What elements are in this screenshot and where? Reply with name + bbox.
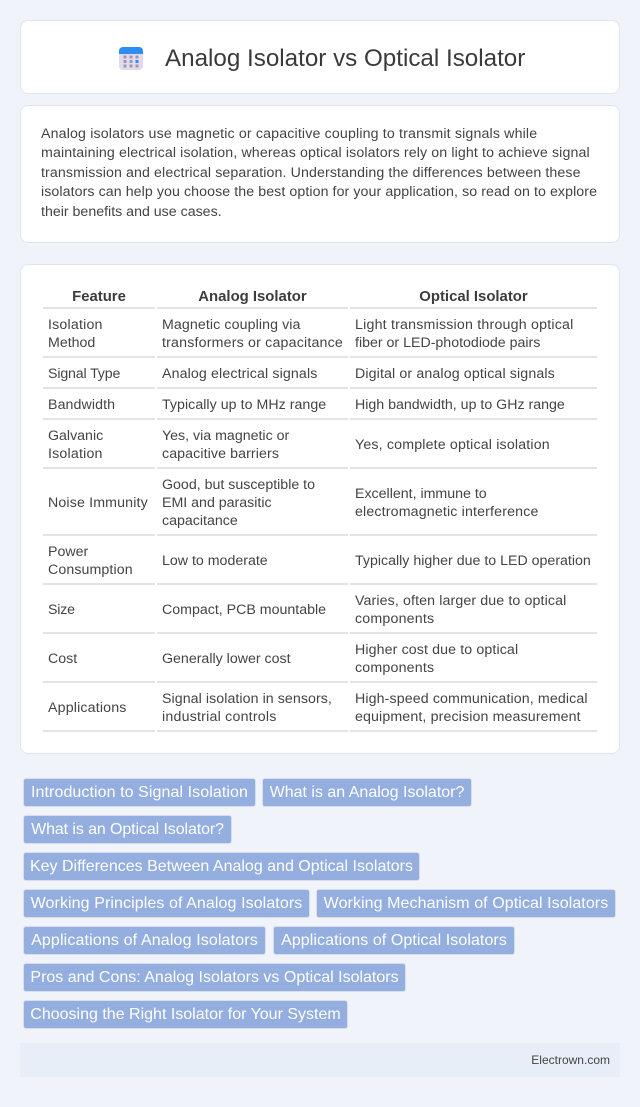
row: applications: Signal isolation in sensors, [162,691,332,707]
row: power consumption: Power [48,544,88,560]
row: galvanic isolation: Galvanic [48,428,103,444]
chip: what is analog [262,778,472,807]
chip: pros and cons [23,963,406,992]
row: size: Compact, PCB mountable [162,602,326,618]
footer credit: Electrown.com [531,1053,610,1067]
chip: choosing: Choosing the Right Isolator for Your System [30,1006,341,1023]
chip: working mechanism: Working Mechanism of Optical Isolators [324,895,608,912]
row: noise immunity: Excellent, immune to [355,486,487,502]
table header row: Feature [72,289,126,305]
chip: what is optical [23,815,232,844]
row: applications [48,691,588,725]
row: signal type [48,366,555,382]
chip: applications optical: Applications of Optical Isolators [281,932,507,949]
comparison table [43,289,597,732]
row: isolation method: Isolation [48,317,103,333]
row: noise immunity: electromagnetic interference [355,504,538,520]
chip: working principles [23,889,310,918]
chip: key differences [23,852,420,881]
chip: introduction [23,778,256,807]
chip: working principles: Working Principles of Analog Isolators [31,895,302,912]
chip: pros and cons: Pros and Cons: Analog Isolators vs Optical Isolators [30,969,399,986]
table header row: Optical Isolator [419,289,528,305]
row: noise immunity: Noise Immunity [48,495,148,511]
intro paragraph: their benefits and use cases. [41,204,222,220]
chip: what is analog: What is an Analog Isolator? [270,784,464,801]
row: galvanic isolation: Yes, via magnetic or [162,428,289,444]
chip: applications optical [273,926,515,955]
row: isolation method: Method [48,335,95,351]
footer bar [20,1043,620,1077]
row: cost: Generally lower cost [162,651,291,667]
row: cost: components [355,660,434,676]
row: applications: industrial controls [162,709,277,725]
row: applications: equipment, precision measurement [355,709,581,725]
chip: what is optical: What is an Optical Isolator? [31,821,224,838]
row: galvanic isolation: Isolation [48,446,103,462]
row: cost: Higher cost due to optical [355,642,518,658]
table header row [72,289,528,305]
row: size [48,593,566,627]
row: signal type: Analog electrical signals [162,366,317,382]
row: isolation method: transformers or capacitance [162,335,343,351]
row: isolation method: Magnetic coupling via [162,317,301,333]
row: size: components [355,611,434,627]
chip: applications analog: Applications of Analog Isolators [31,932,258,949]
row: bandwidth: Bandwidth [48,397,115,413]
icon: calendar grid [119,47,143,70]
title: Analog Isolator vs Optical Isolator [165,45,525,72]
row: applications: Applications [48,700,127,716]
row: cost: Cost [48,651,77,667]
row: applications: High-speed communication, medical [355,691,588,707]
row: noise immunity: Good, but susceptible to [162,477,315,493]
intro paragraph: Analog isolators use magnetic or capacitive coupling to transmit signals while [41,126,537,142]
chip: introduction: Introduction to Signal Isolation [31,784,248,801]
row: power consumption [48,544,591,578]
row: noise immunity: EMI and parasitic [162,495,272,511]
header panel [20,20,620,94]
row: bandwidth: High bandwidth, up to GHz range [355,397,565,413]
row: isolation method: fiber or LED-photodiode pairs [355,335,540,351]
row: signal type: Signal Type [48,366,120,382]
row: bandwidth [48,397,565,413]
row: galvanic isolation: Yes, complete optical isolation [355,437,550,453]
chip: choosing [23,1000,348,1029]
table header row: Analog Isolator [198,289,307,305]
row: power consumption: Low to moderate [162,553,268,569]
row: noise immunity: capacitance [162,513,238,529]
chip: applications analog [23,926,266,955]
row: isolation method [48,317,574,351]
row: bandwidth: Typically up to MHz range [162,397,326,413]
row: power consumption: Typically higher due to LED operation [355,553,591,569]
intro paragraph: maintaining electrical isolation, whereas optical isolators rely on light to achieve signal [41,145,590,161]
row: galvanic isolation [48,428,550,462]
row: size: Varies, often larger due to optical [355,593,566,609]
intro paragraph: isolators can help you choose the best option for your application, so read on to explore [41,184,597,200]
topic links [23,778,616,1029]
intro paragraph [41,126,597,220]
comparison table panel [20,264,620,754]
row: noise immunity [48,477,538,529]
intro paragraph: transmission and electrical separation. Understanding the differences between these [41,164,581,180]
chip: working mechanism [316,889,616,918]
row: cost [48,642,518,676]
row: signal type: Digital or analog optical signals [355,366,555,382]
row: isolation method: Light transmission through optical [355,317,574,333]
chip: key differences: Key Differences Between Analog and Optical Isolators [30,858,413,875]
row: power consumption: Consumption [48,562,133,578]
row: size: Size [48,602,75,618]
intro text panel [20,105,620,243]
row: galvanic isolation: capacitive barriers [162,446,279,462]
